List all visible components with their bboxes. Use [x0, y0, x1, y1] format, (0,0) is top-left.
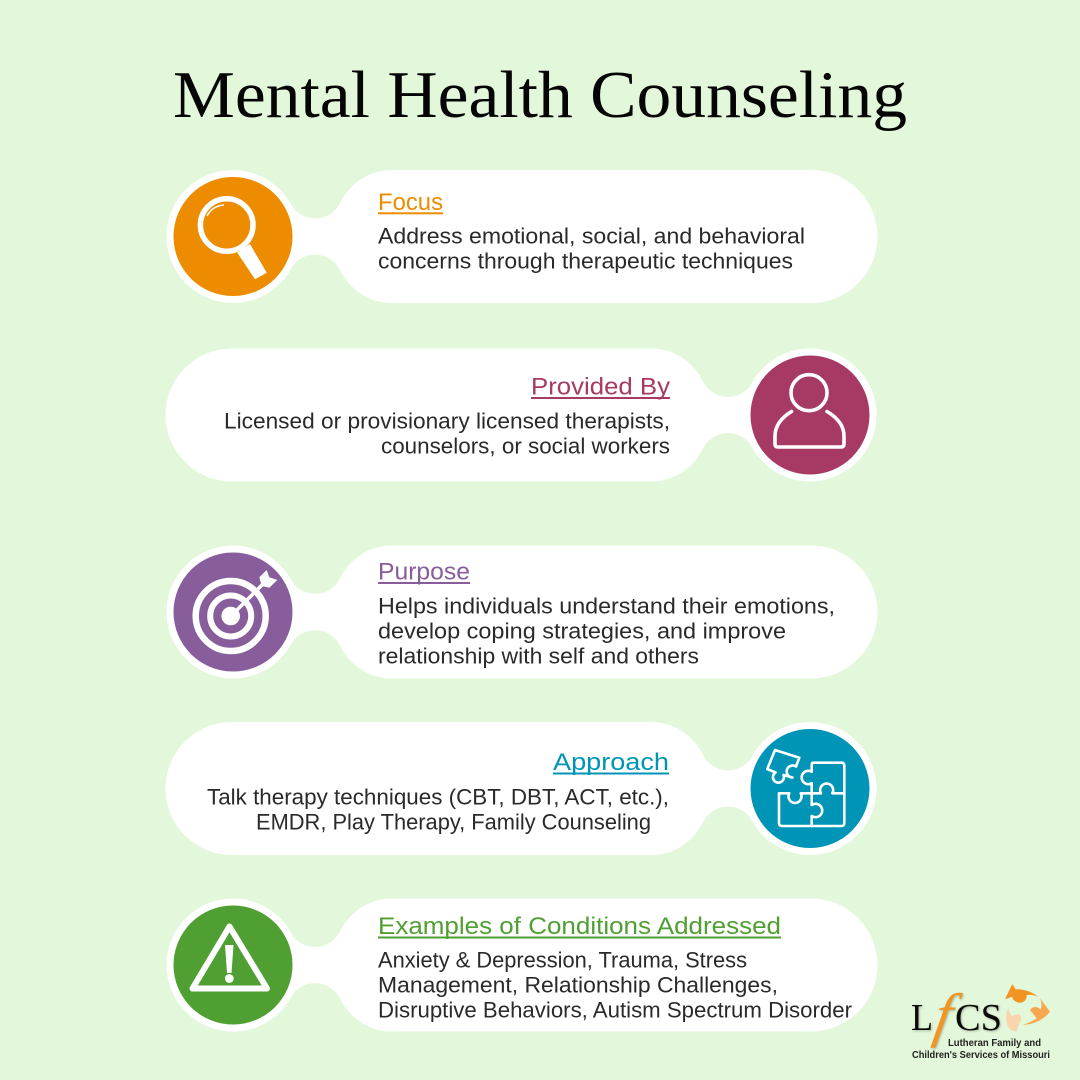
text: purpose description: develop coping strategies, and improve: [378, 618, 786, 644]
heading: Purpose: Purpose: [378, 558, 470, 586]
icon: target with arrow: [166, 546, 300, 678]
title: Mental Health Counseling: [173, 58, 907, 132]
text: provided by description: counselors, or social workers: [381, 434, 670, 458]
logo letters: [911, 982, 1002, 1049]
panel: examples of conditions: [166, 898, 878, 1032]
heading: Provided By: Provided By: [531, 374, 671, 400]
logo: LFCS: [911, 982, 1050, 1061]
logo letters: f: [930, 982, 965, 1049]
text: purpose description: [378, 594, 835, 668]
text: purpose description: Helps individuals understand their emotions,: [378, 594, 835, 618]
logo caption: Lutheran Family and: [948, 1038, 1041, 1049]
panel: purpose: [166, 546, 878, 678]
text: purpose description: relationship with self and others: [378, 644, 699, 668]
icon: warning triangle: [166, 898, 300, 1032]
pill connector shape: [233, 898, 878, 1032]
text: focus description: Address emotional, social, and behavioral: [378, 224, 805, 248]
text: approach description: [207, 784, 669, 834]
panel: approach: [166, 722, 876, 855]
logo letters: L: [911, 997, 933, 1039]
text: focus description: concerns through therapeutic techniques: [378, 248, 793, 274]
text: examples description: [378, 948, 852, 1022]
pill connector shape: [233, 170, 878, 303]
icon: magnifying glass: [166, 170, 300, 303]
pill connector shape: [166, 348, 810, 482]
icon: person: [744, 348, 876, 482]
text: examples description: Disruptive Behaviors, Autism Spectrum Disorder: [378, 998, 852, 1022]
logo caption: [912, 1038, 1050, 1061]
text: approach description: Talk therapy techniques (CBT, DBT, ACT, etc.),: [207, 784, 669, 810]
pill connector shape: [166, 722, 810, 855]
text: examples description: Anxiety & Depression, Trauma, Stress: [378, 948, 747, 972]
heading: Approach: Approach: [553, 749, 669, 776]
panel: focus: [166, 170, 878, 303]
panel: provided by: [166, 348, 876, 482]
logo emblem: [1005, 984, 1050, 1032]
heading: Focus: Focus: [378, 189, 443, 216]
pill connector shape: [233, 546, 878, 678]
text: approach description: EMDR, Play Therapy, Family Counseling: [256, 810, 651, 834]
logo letters: CS: [955, 997, 1002, 1039]
text: focus description: [378, 224, 805, 274]
heading: Examples of Conditions Addressed: Examples of Conditions Addressed: [378, 913, 781, 940]
text: examples description: Management, Relationship Challenges,: [378, 972, 778, 998]
icon: puzzle pieces: [744, 722, 876, 855]
logo caption: Children's Services of Missouri: [912, 1050, 1050, 1061]
text: provided by description: [224, 408, 670, 458]
text: provided by description: Licensed or provisionary licensed therapists,: [224, 408, 670, 434]
